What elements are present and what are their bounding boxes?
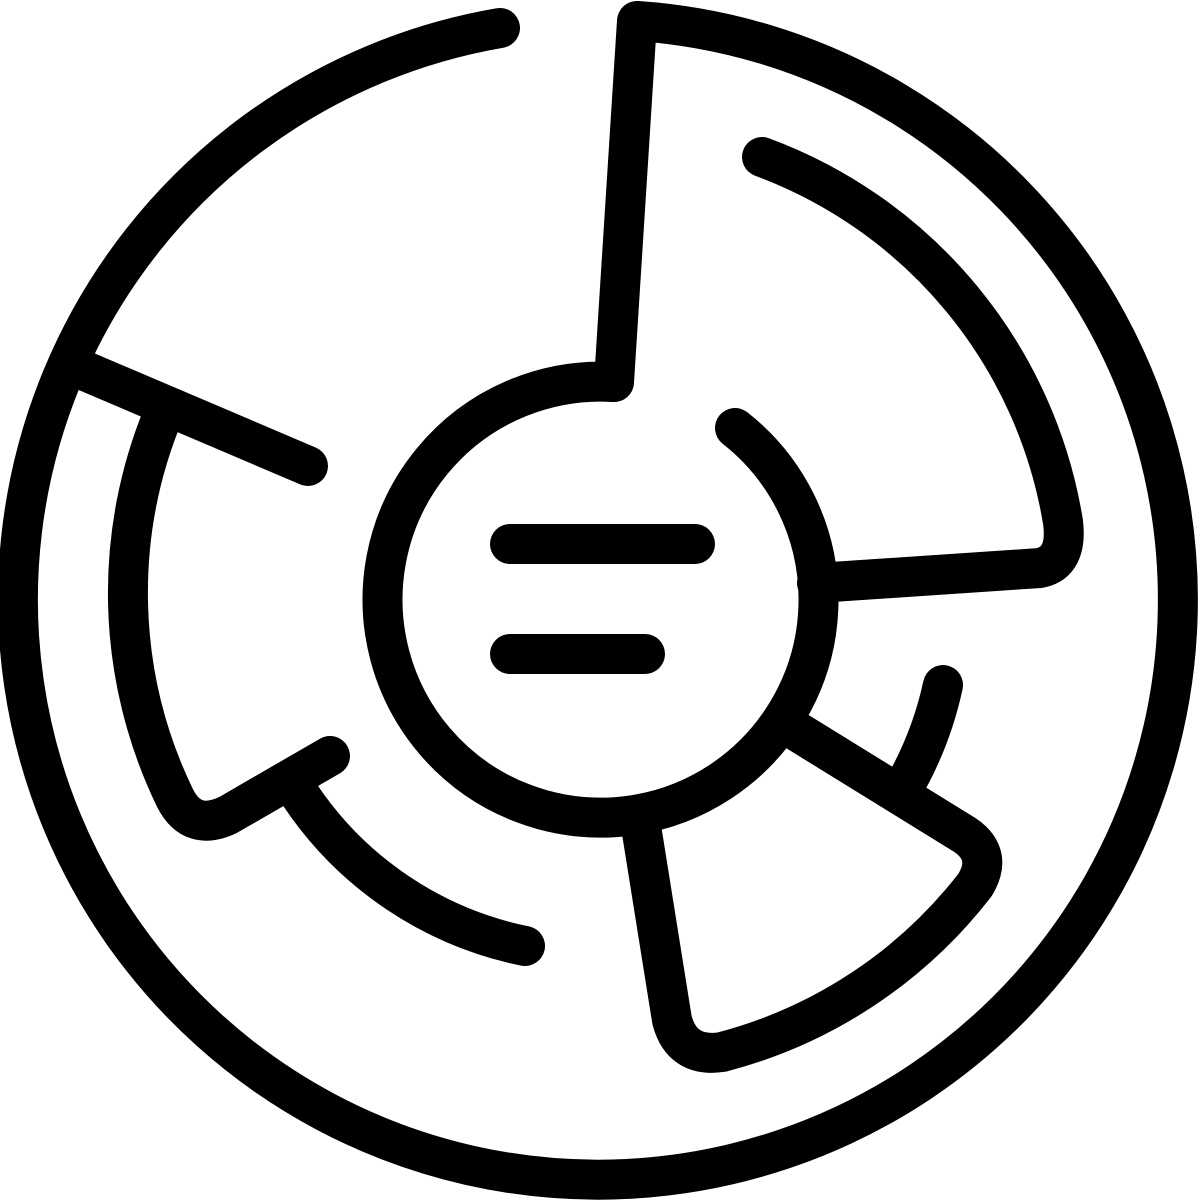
small right arc [905, 685, 943, 785]
left slice [78, 368, 330, 821]
right slice [762, 157, 1064, 583]
bottom-left arc [300, 795, 525, 946]
inner circle [383, 382, 819, 818]
equals sign [510, 544, 695, 654]
bottom-right slice [640, 727, 982, 1053]
